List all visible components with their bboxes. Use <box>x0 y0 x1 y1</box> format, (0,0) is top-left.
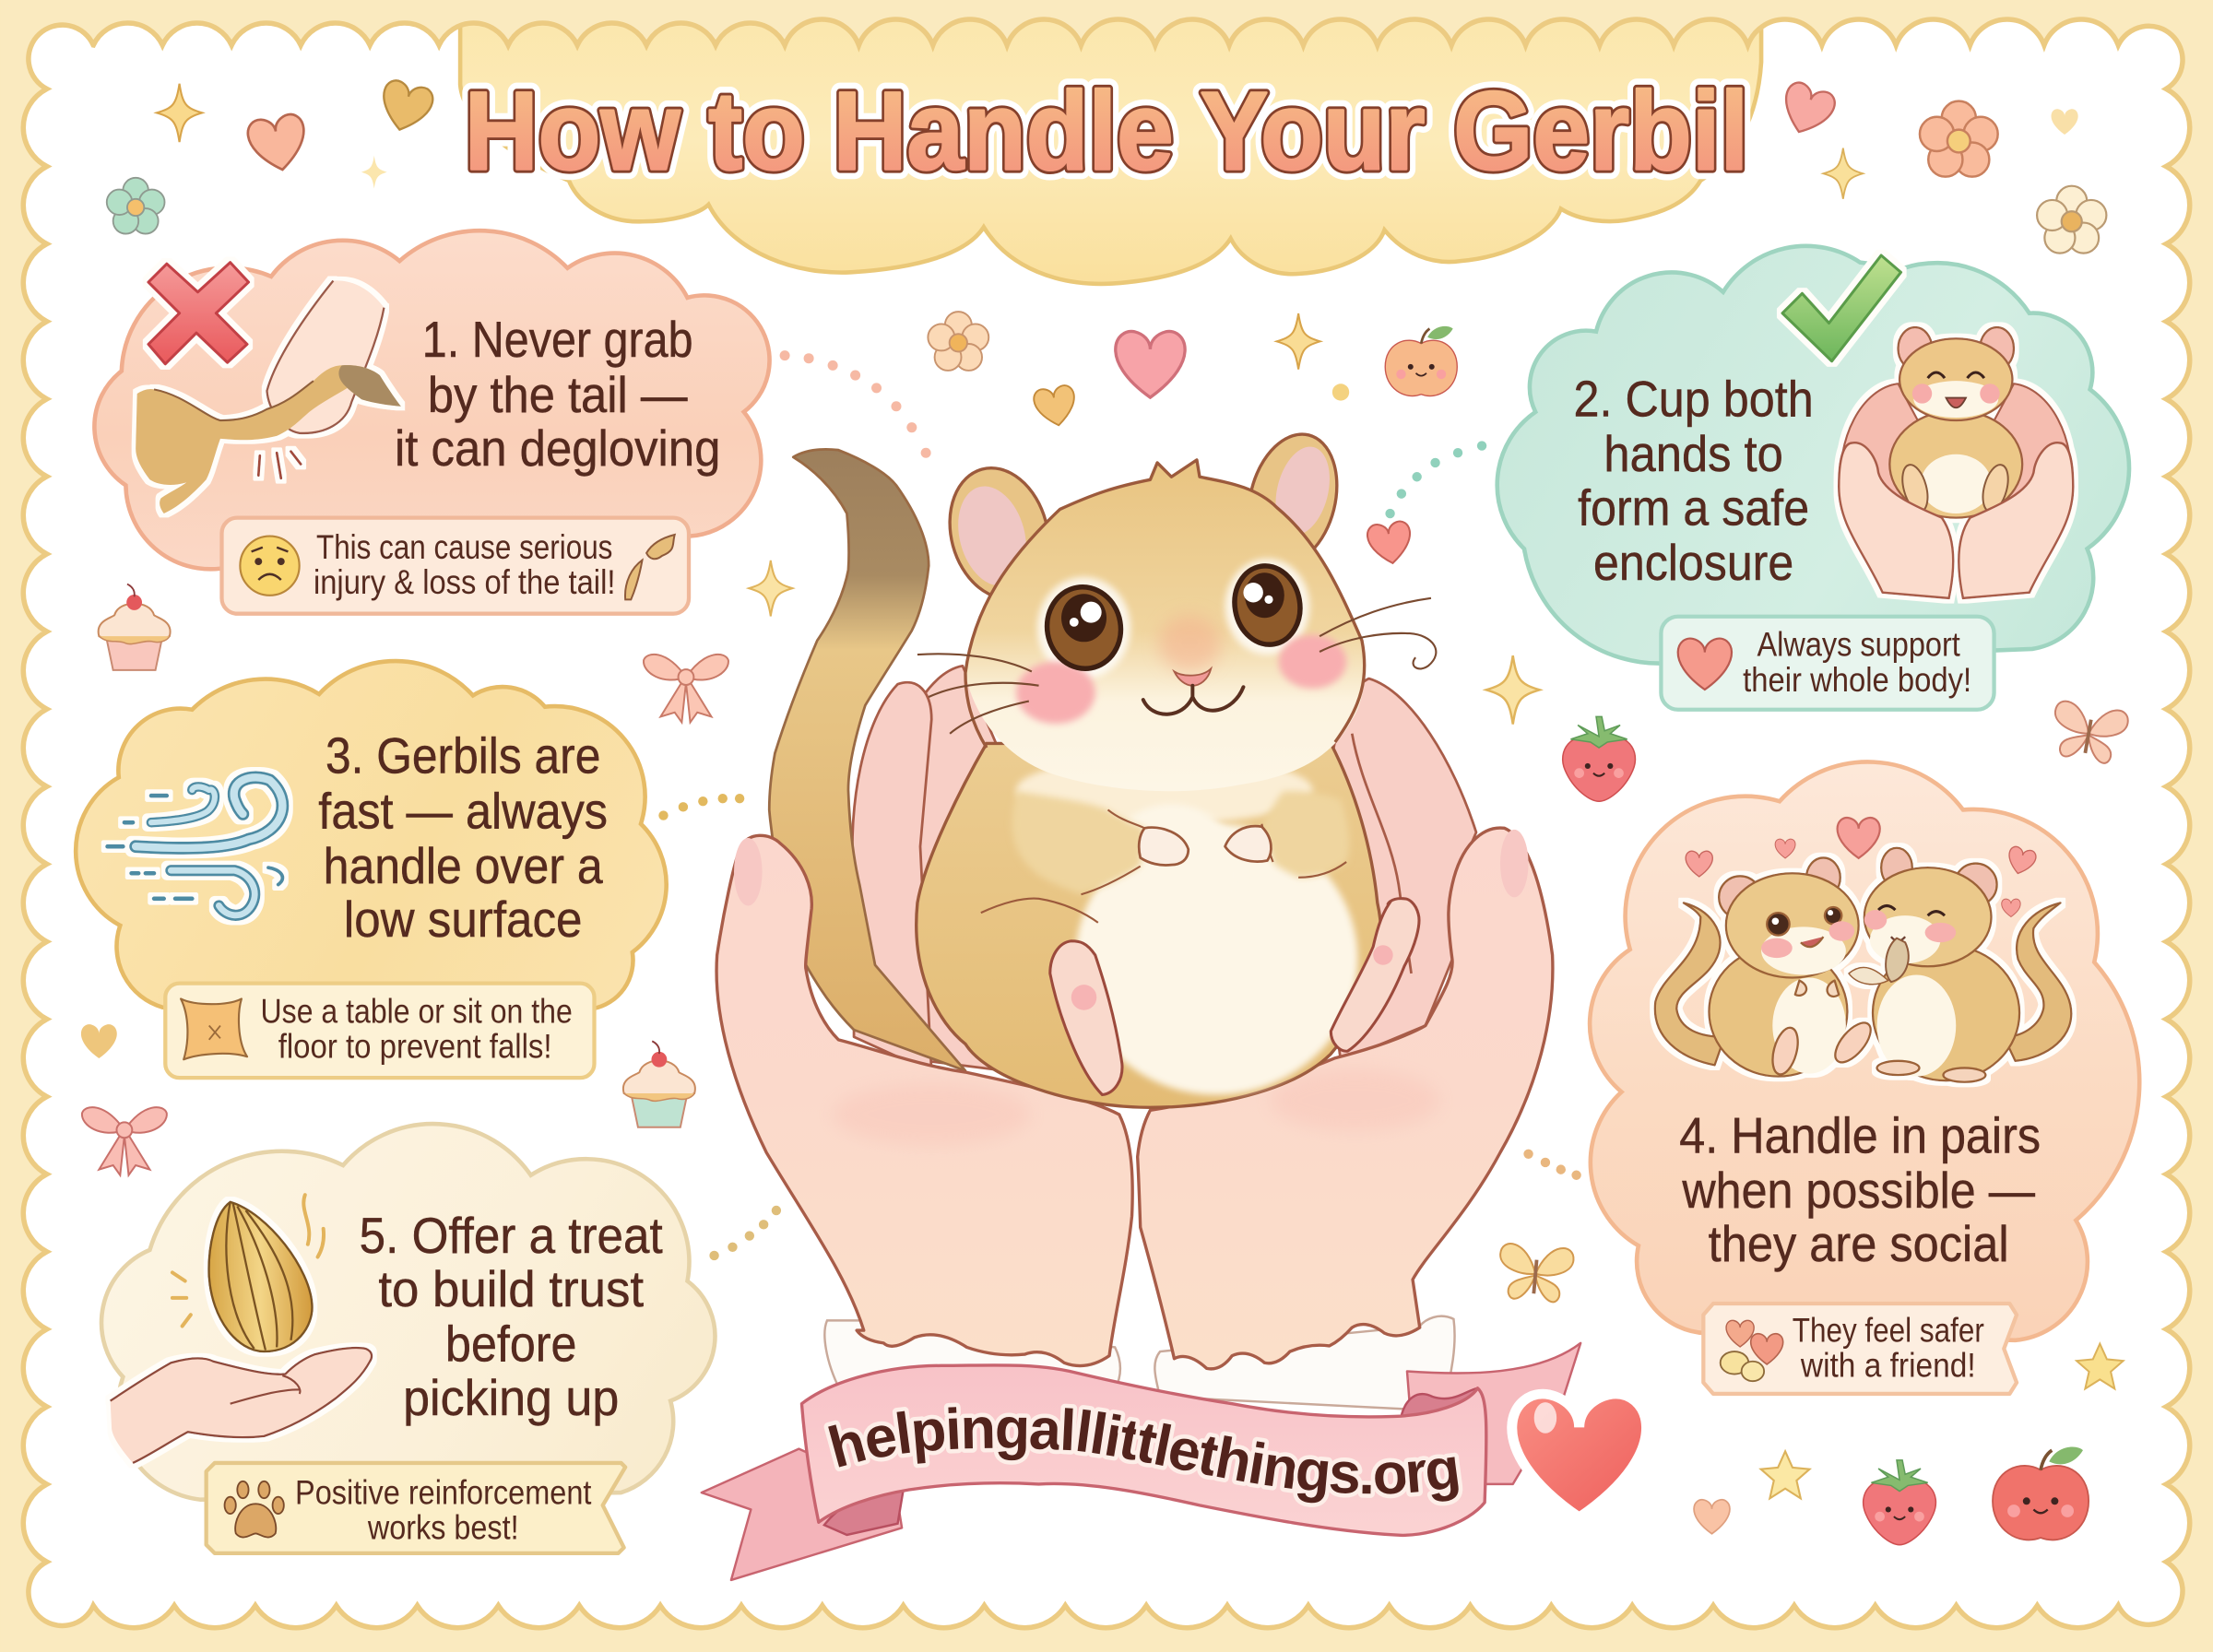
panel 4 text <box>1679 1106 2041 1272</box>
panel 5 text: picking up <box>403 1369 619 1426</box>
panel 1 cloud <box>94 230 770 569</box>
callout: table or floor: floor to prevent falls! <box>278 1028 552 1066</box>
callout: positive reinforcement: Positive reinforcement <box>295 1473 591 1511</box>
panel 1 text: 1. Never grab <box>422 311 693 368</box>
panel 2 text: form a safe <box>1578 478 1809 536</box>
decorations: flowers <box>107 101 2106 371</box>
icon: sunflower seed <box>209 1202 313 1351</box>
panel 4 cloud <box>1590 761 2139 1340</box>
panel 4 text: they are social <box>1709 1215 2009 1272</box>
decorations: butterflies <box>1497 700 2130 1304</box>
icon: wind swirl <box>108 777 282 915</box>
gerbil face <box>917 559 1436 734</box>
title cloud <box>460 0 1761 284</box>
panel 3: handle over a low surface <box>76 661 667 1078</box>
gerbil arms and paws <box>981 791 1349 923</box>
panel 4: handle in pairs <box>1590 761 2139 1394</box>
callout: table or floor: Use a table or sit on the <box>261 992 573 1030</box>
panel 5: offer a treat <box>101 1124 715 1553</box>
gerbil body <box>917 743 1381 1107</box>
left gerbil <box>1655 857 1877 1077</box>
callout: positive reinforcement: works best! <box>367 1509 519 1547</box>
decorations: sparkles and stars <box>157 84 2124 1498</box>
callout: serious injury: This can cause serious <box>316 528 612 566</box>
fingers behind gerbil <box>852 666 1476 1072</box>
title: How to Handle Your Gerbil <box>465 69 1748 194</box>
callout: safer with a friend: They feel safer <box>1793 1311 1984 1349</box>
icon: cupped hands with gerbil <box>1839 327 2073 598</box>
panel 3 text: fast — always <box>318 782 608 839</box>
panel 5 text <box>360 1207 663 1426</box>
decorations: hearts <box>81 78 2078 1534</box>
callout: serious injury <box>221 518 689 614</box>
panel 2 text: hands to <box>1604 425 1783 482</box>
callout: safer with a friend: with a friend! <box>1800 1347 1976 1385</box>
panel 5 text: to build trust <box>378 1260 644 1317</box>
ribbon banner <box>701 1342 1582 1582</box>
decorations: bows <box>82 655 728 1175</box>
sleeve cuffs <box>824 1316 1455 1410</box>
panel 4 text: 4. Handle in pairs <box>1679 1106 2041 1163</box>
icon: green check <box>1782 255 1901 361</box>
callout: support whole body: Always support <box>1757 626 1960 664</box>
icon: red cross <box>148 263 249 364</box>
icon: open hand <box>111 1348 372 1463</box>
panel 5 text: before <box>445 1316 576 1373</box>
thumb nails and palm shading <box>734 830 1529 1146</box>
panel 2: cup both hands <box>1497 246 2129 710</box>
icon: big red heart <box>1512 1394 1647 1517</box>
panel 2 cloud <box>1497 246 2129 664</box>
panel 1 text: it can degloving <box>395 419 720 477</box>
panel 1: never grab by the tail <box>94 230 770 614</box>
panel 3 text: handle over a <box>324 837 603 894</box>
callout: serious injury: injury & loss of the tail! <box>314 563 615 601</box>
panel 2 text: enclosure <box>1593 534 1793 591</box>
icon: floating hearts <box>1686 818 2038 917</box>
decorations: cupcakes <box>99 584 695 1127</box>
callout: positive reinforcement <box>207 1463 625 1553</box>
title: How to Handle Your Gerbil <box>465 69 1748 194</box>
dotted connector trails <box>658 350 1581 1260</box>
panel 1 text <box>395 311 720 477</box>
ribbon banner: helpingalllittlethings.org <box>824 1403 1462 1507</box>
central illustration: gerbil in hands <box>701 432 1582 1582</box>
decorations: strawberries and apples <box>1385 326 2089 1545</box>
gerbil belly <box>1016 756 1357 1095</box>
callout: support whole body: their whole body! <box>1743 661 1971 699</box>
right hand <box>1138 828 1553 1369</box>
gerbil ears <box>936 425 1350 609</box>
panel 3 text: low surface <box>344 891 582 948</box>
left hand <box>716 835 1132 1366</box>
panel 4 text: when possible — <box>1681 1162 2036 1219</box>
gerbil feet <box>1050 899 1419 1095</box>
gerbil tail <box>769 449 965 1071</box>
callout: support whole body <box>1661 617 1994 710</box>
panel 5 text: 5. Offer a treat <box>360 1207 663 1264</box>
icon: two gerbils sharing a seed <box>1655 848 2071 1082</box>
right gerbil <box>1864 848 2071 1082</box>
panel 5 cloud <box>101 1124 715 1500</box>
icon: steam and shine ticks <box>172 1195 324 1326</box>
panel 3 text: 3. Gerbils are <box>325 727 600 785</box>
title: How to Handle Your Gerbil <box>465 69 1748 194</box>
panel 1 text: by the tail — <box>428 366 688 423</box>
panel 3 text <box>318 727 608 948</box>
icon: hand pinching gerbil tail <box>136 280 401 513</box>
gerbil head <box>965 460 1365 791</box>
panel 2 text: 2. Cup both <box>1574 370 1814 427</box>
seed <box>1849 967 1888 985</box>
panel 3 cloud <box>76 661 667 1009</box>
callout: safer with a friend <box>1703 1304 2017 1394</box>
callout: table or floor <box>165 984 594 1078</box>
panel 2 text <box>1574 370 1814 591</box>
